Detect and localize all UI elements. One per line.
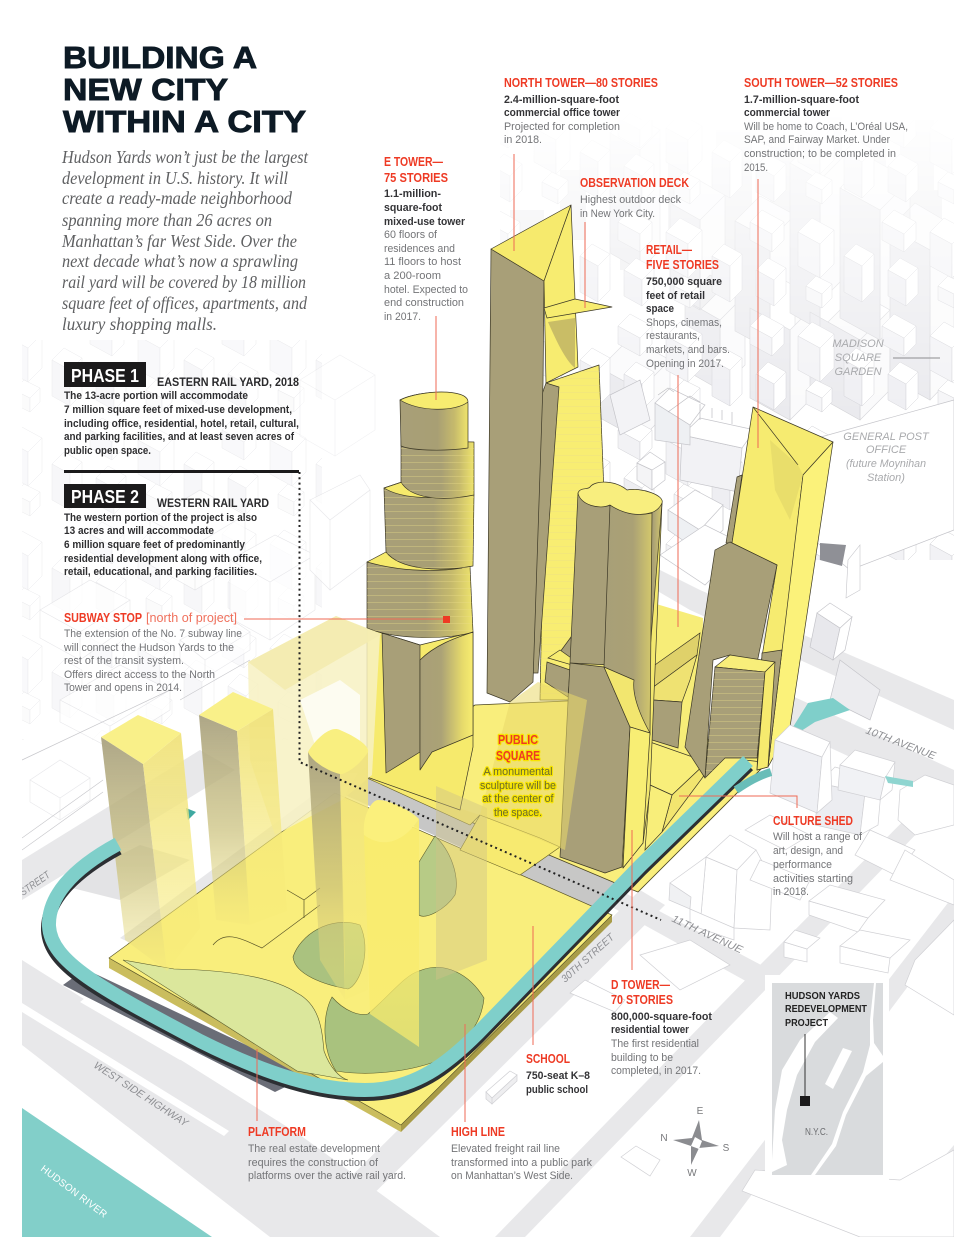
- distant Manhattan skyline: [500, 161, 954, 560]
- callout: platform: [248, 1125, 406, 1182]
- callout: observation deck: in New York City.: [580, 208, 655, 220]
- divider rule: [64, 470, 299, 473]
- label: Madison Square Garden: SQUARE: [835, 352, 882, 364]
- callout: D tower: The first residential: [611, 1038, 699, 1050]
- street labels: 10TH AVENUE: [864, 725, 938, 763]
- inset locator map: REDEVELOPMENT: [785, 1003, 868, 1015]
- callout: school: [526, 1052, 590, 1096]
- compass: N: [660, 1133, 668, 1144]
- ghost block front of public square: [480, 682, 587, 850]
- red leader lines: [244, 154, 797, 1122]
- inset locator map: PROJECT: [785, 1017, 829, 1029]
- Hudson River: [772, 1012, 838, 1172]
- Hudson River: [22, 1108, 212, 1237]
- ghost tower 5: [436, 786, 487, 980]
- panel: phase 2: 6 million square feet of predominantly: [64, 539, 246, 551]
- Hudson River: HUDSON RIVER: [38, 1164, 109, 1221]
- E tower: [367, 392, 474, 810]
- callout: public square: SQUARE: [496, 749, 540, 763]
- panel: phase 1: [64, 362, 300, 457]
- callout: E tower: in 2017.: [384, 311, 421, 323]
- eastern platform: [367, 700, 770, 892]
- callout: observation deck: [580, 176, 689, 220]
- callout: high line: HIGH LINE: [451, 1125, 505, 1139]
- callout: public square: the space.: [494, 807, 542, 819]
- callout: culture shed: CULTURE SHED: [773, 814, 853, 828]
- callout: south tower: 1.7-million-square-foot: [744, 94, 859, 106]
- callout: retail: 750,000 square: [646, 276, 722, 288]
- callout: E tower: E TOWER—: [384, 155, 443, 169]
- retail wing beside north tower: [545, 637, 574, 697]
- callout: platform: PLATFORM: [248, 1125, 306, 1139]
- south tower: [685, 407, 833, 778]
- intro text: luxury shopping malls.: [62, 314, 217, 334]
- rail pit beside the western platform: [63, 969, 310, 1092]
- callout: culture shed: [773, 814, 863, 898]
- panel: phase 1: The 13-acre portion will accommodate: [64, 390, 248, 402]
- callout: E tower: hotel. Expected to: [384, 284, 468, 296]
- callout: north tower: Projected for completion: [504, 121, 620, 133]
- callout: observation deck: OBSERVATION DECK: [580, 176, 689, 190]
- callout: school: SCHOOL: [526, 1052, 570, 1066]
- callout: platform: platforms over the active rail yard.: [248, 1170, 406, 1182]
- label: General Post Office: [843, 431, 930, 484]
- callout: south tower: Will be home to Coach, L’Oréal USA,: [744, 121, 908, 133]
- callout: D tower: 800,000-square-foot: [611, 1011, 712, 1023]
- callout: subway stop: Offers direct access to the North: [64, 669, 215, 681]
- ghost tower 1: [101, 715, 200, 971]
- street labels: 11TH AVENUE: [670, 913, 746, 957]
- callout: D tower: [611, 978, 712, 1077]
- callout: culture shed: Will host a range of: [773, 831, 863, 843]
- title: BUILDING A: [63, 40, 257, 75]
- title: [63, 40, 306, 139]
- panel: phase 2: residential development along with office,: [64, 553, 262, 565]
- callout: platform: The real estate development: [248, 1143, 380, 1155]
- label: Madison Square Garden: GARDEN: [834, 366, 882, 378]
- callout: E tower: mixed-use tower: [384, 216, 466, 228]
- callout: E tower: square-foot: [384, 202, 442, 214]
- compass: W: [687, 1168, 697, 1179]
- label: General Post Office: OFFICE: [866, 444, 907, 456]
- callout: culture shed: activities starting: [773, 873, 853, 885]
- compass: E: [697, 1106, 704, 1117]
- dark street shadow: [820, 543, 846, 566]
- street labels: 30TH STREET: [559, 930, 618, 985]
- label: Madison Square Garden: [832, 338, 884, 378]
- callout: culture shed: art, design, and: [773, 845, 843, 857]
- callout: subway stop: [63, 611, 242, 694]
- callout: retail: Shops, cinemas,: [646, 317, 722, 329]
- callout: D tower: 70 STORIES: [611, 993, 673, 1007]
- callout: high line: [451, 1125, 592, 1182]
- callout: retail: space: [646, 303, 674, 315]
- label: General Post Office: Station): [867, 472, 905, 484]
- intro text: development in U.S. history. It will: [62, 168, 288, 188]
- ghost block behind towers: [248, 616, 382, 835]
- panel: phase 2: PHASE 2: [71, 487, 139, 507]
- ghost tower 2: [199, 692, 287, 925]
- intro text: Hudson Yards won’t just be the largest: [61, 147, 309, 167]
- callout: south tower: construction; to be completed in: [744, 148, 896, 160]
- panel: phase 1: including office, residential, hotel, retail, cultural,: [64, 418, 299, 430]
- callout: E tower: end construction: [384, 297, 464, 309]
- panel: phase 1: and parking facilities, and at least seven acres of: [64, 431, 294, 443]
- inset locator map: [765, 975, 889, 1180]
- panel: phase 1: PHASE 1: [71, 366, 139, 386]
- callout: south tower: SOUTH TOWER—52 STORIES: [744, 76, 898, 90]
- intro text: create a ready-made neighborhood: [62, 188, 292, 208]
- D tower: [560, 482, 662, 873]
- callout: D tower: building to be: [611, 1052, 673, 1064]
- Central Park: [825, 1048, 852, 1089]
- western ghost towers: [101, 616, 587, 1047]
- inset locator map: N.Y.C.: [805, 1127, 828, 1138]
- intro text: next decade what’s now a sprawling: [62, 251, 298, 271]
- callout: E tower: 1.1-million-: [384, 188, 441, 200]
- panel: phase 2: WESTERN RAIL YARD: [157, 498, 269, 510]
- callout: retail: FIVE STORIES: [646, 258, 719, 272]
- compass: [660, 1106, 730, 1179]
- callout: observation deck: Highest outdoor deck: [580, 194, 681, 206]
- highway median: [22, 1003, 229, 1136]
- callout: school: public school: [526, 1084, 588, 1096]
- callout: public square: sculpture will be: [480, 780, 556, 792]
- callout: retail: RETAIL—: [646, 243, 692, 257]
- intro text: rail yard will be covered by 18 million: [62, 272, 306, 292]
- callout: E tower: 60 floors of: [384, 229, 438, 241]
- street labels: WEST SIDE HIGHWAY: [91, 1059, 191, 1130]
- western platform: [109, 793, 612, 1132]
- label: General Post Office: (future Moynihan: [846, 458, 926, 470]
- panel: phase 2: retail, educational, and parking facilities.: [64, 566, 257, 578]
- callout: south tower: 2015.: [744, 162, 768, 174]
- callout: north tower: commercial office tower: [504, 107, 621, 119]
- street labels: [18, 725, 938, 1130]
- callout: retail: markets, and bars.: [646, 344, 730, 356]
- callout: subway stop: [north of project]: [146, 611, 237, 625]
- intro text: square feet of offices, apartments, and: [62, 293, 307, 313]
- callout: subway stop: SUBWAY STOP: [64, 611, 142, 625]
- callout: south tower: SAP, and Fairway Market. Under: [744, 134, 890, 146]
- subway stop marker: [443, 616, 450, 623]
- panel: phase 1: 7 million square feet of mixed-use development,: [64, 404, 292, 416]
- callout: E tower: a 200-room: [384, 270, 441, 282]
- callout: high line: Elevated freight rail line: [451, 1143, 560, 1155]
- callout: public square: PUBLIC: [498, 733, 538, 747]
- high line: [47, 761, 771, 1094]
- panel: phase 1: public open space.: [64, 445, 151, 457]
- callout: high line: transformed into a public park: [451, 1157, 592, 1169]
- panel: phase 2: The western portion of the project is also: [64, 512, 257, 524]
- callout: north tower: in 2018.: [504, 134, 542, 146]
- callout: E tower: residences and: [384, 243, 455, 255]
- title: WITHIN A CITY: [63, 104, 306, 139]
- callout: public square: A monumental: [484, 766, 552, 778]
- faint city texture behind left column: [22, 340, 322, 740]
- callout: platform: requires the construction of: [248, 1157, 379, 1169]
- callout: retail: feet of retail: [646, 290, 705, 302]
- callout: subway stop: will connect the Hudson Yards to the: [63, 642, 234, 654]
- callout: D tower: D TOWER—: [611, 978, 670, 992]
- callout: E tower: 11 floors to host: [384, 256, 461, 268]
- street labels: STREET: [18, 868, 54, 898]
- callout: D tower: residential tower: [611, 1024, 690, 1036]
- park lawns: [123, 960, 348, 1080]
- midtown mid-ground buildings: [610, 380, 954, 720]
- callout: public square: at the center of: [482, 793, 554, 805]
- culture shed building: [770, 725, 832, 813]
- lower-right white buildings: [486, 750, 954, 1237]
- callout: retail: restaurants,: [646, 330, 700, 342]
- Harlem and East River: [811, 983, 883, 1175]
- intro text: Manhattan’s far West Side. Over the: [61, 231, 297, 251]
- title: NEW CITY: [63, 72, 228, 107]
- north tower: [487, 205, 612, 702]
- callout: north tower: [504, 76, 658, 146]
- callout: subway stop: The extension of the No. 7 subway line: [64, 628, 242, 640]
- callout: retail: [646, 243, 730, 370]
- intro text: spanning more than 26 acres on: [62, 210, 272, 230]
- upper high line segment: [793, 698, 850, 735]
- panel: phase 1: EASTERN RAIL YARD, 2018: [157, 377, 300, 389]
- label: Madison Square Garden: MADISON: [832, 338, 884, 350]
- inset locator map: HUDSON YARDS: [785, 990, 860, 1002]
- left-side low-rise blocks: [30, 355, 375, 820]
- callout: subway stop: rest of the transit system.: [64, 655, 184, 667]
- compass: S: [723, 1143, 730, 1154]
- callout: south tower: [744, 76, 908, 174]
- stepped midtown rooftops: [658, 388, 732, 424]
- callout: D tower: completed, in 2017.: [611, 1065, 701, 1077]
- callout: south tower: commercial tower: [744, 107, 831, 119]
- madison square garden leader: [893, 357, 940, 359]
- panel: phase 2: 13 acres and will accommodate: [64, 525, 214, 537]
- callout: retail: Opening in 2017.: [646, 358, 724, 370]
- callout: E tower: 75 STORIES: [384, 171, 448, 185]
- ghost tower 4: [364, 800, 419, 1047]
- callout: subway stop: Tower and opens in 2014.: [64, 682, 182, 694]
- callout: north tower: NORTH TOWER—80 STORIES: [504, 76, 658, 90]
- callout: high line: on Manhattan’s West Side.: [451, 1170, 573, 1182]
- dotted phase boundary: [300, 472, 661, 920]
- intro text: [61, 147, 309, 334]
- retail podium: [645, 603, 707, 850]
- eastern yard road: [345, 765, 625, 910]
- panel: phase 2: [64, 484, 269, 578]
- label: General Post Office: GENERAL POST: [843, 431, 930, 443]
- callout: culture shed: performance: [773, 859, 832, 871]
- callout: culture shed: in 2018.: [773, 886, 809, 898]
- ghost tower 3: [308, 729, 368, 1000]
- callout: school: 750-seat K–8: [526, 1070, 590, 1082]
- callout: north tower: 2.4-million-square-foot: [504, 94, 619, 106]
- callout: E tower: [384, 155, 468, 323]
- callout: public square: [480, 733, 556, 819]
- soft shadows inside the loop: [60, 845, 190, 900]
- street grid: [22, 560, 954, 1237]
